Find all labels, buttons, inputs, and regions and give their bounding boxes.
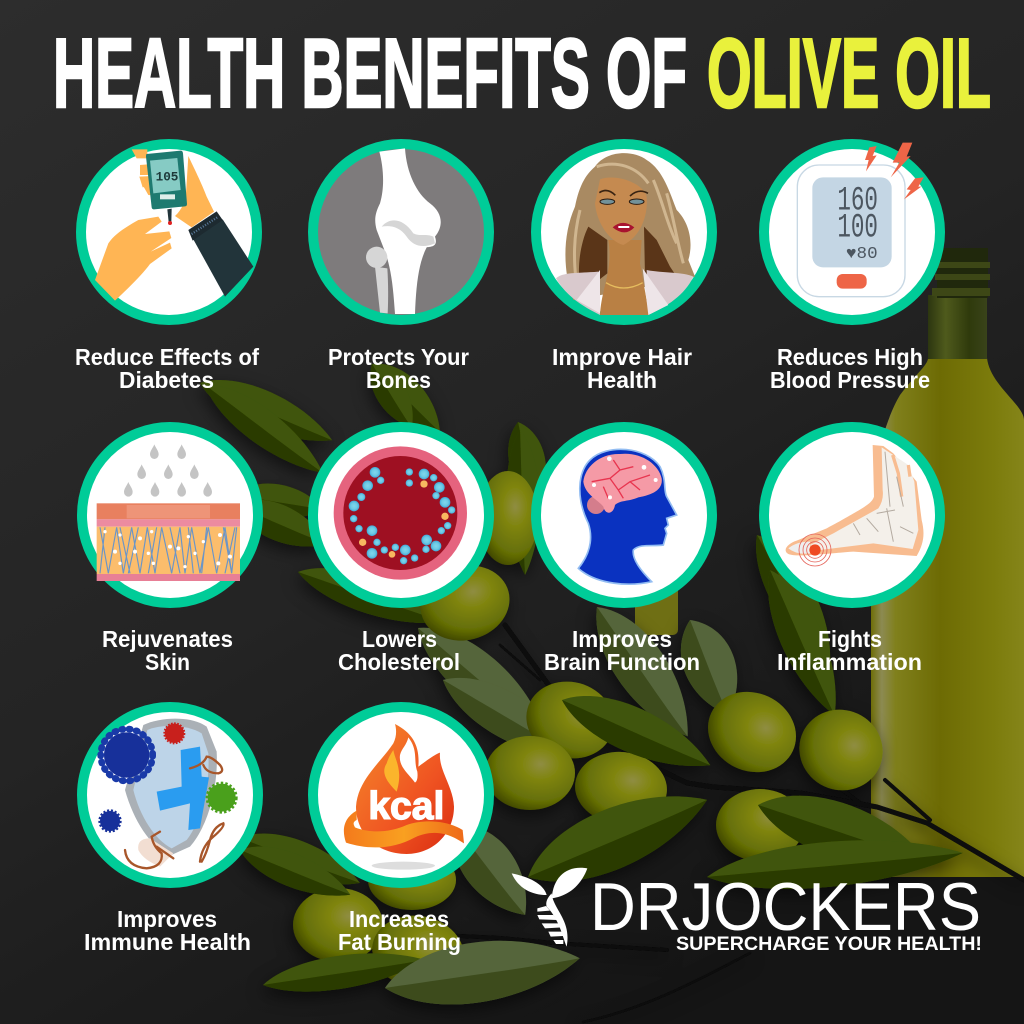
label: Protects Your [328,344,469,370]
label: Fights [818,626,882,652]
label: Inflammation [777,649,922,675]
label: Immune Health [84,929,251,955]
olives [293,471,896,995]
icon: glucose meter and hands: 105 [156,169,178,184]
panel: reduce effects of diabetes [75,144,259,393]
icon: knee joint x-ray [366,148,441,314]
logo: DrJockers: SUPERCHARGE YOUR HEALTH! [676,934,982,955]
icon: kcal flame with tape measure: kcal [368,784,444,828]
icon: blood pressure monitor: 100 [837,209,878,247]
icon: blood pressure monitor [797,143,924,297]
icon: glucose meter and hands [95,149,253,301]
icon: foot bones with pain point [786,445,923,566]
branch stems [440,625,1024,1022]
icon: skin layers with droplets [97,444,240,581]
icon: blood pressure monitor: ♥80 [846,245,878,264]
label: Blood Pressure [770,367,930,393]
icon: head silhouette with brain [578,449,677,584]
label: Cholesterol [338,649,460,675]
label: Increases [349,906,449,932]
label: Reduces High [777,344,923,370]
icon: shield with viruses [100,719,236,868]
panel: increases fat burning [313,707,489,955]
panel: rejuvenates skin [82,427,258,675]
panel: fights inflammation [764,427,940,675]
icon: kcal flame with tape measure [344,724,464,870]
olive oil bottle [635,248,1024,877]
panel: reduces high blood pressure [764,143,940,393]
panel: protects your bones [313,144,489,393]
label: Bones [366,367,431,393]
label: Reduce Effects of [75,344,259,370]
icon: DNA leaf mark [512,868,587,947]
label: Improves [117,906,217,932]
icon: woman with long hair [556,153,695,315]
icon: blood pressure monitor: 160 [837,183,878,221]
label: Skin [145,649,190,675]
label: Rejuvenates [102,626,233,652]
label: Health [587,367,657,393]
logo: DrJockers [512,868,982,955]
label: Improves [572,626,672,652]
panel: lowers cholesterol [313,427,489,675]
label: Lowers [362,626,437,652]
label: Brain Function [544,649,700,675]
logo: DrJockers: DRJOCKERS [590,869,981,945]
panel: improve hair health [536,144,712,393]
label: Diabetes [119,367,214,393]
label: Improve Hair [552,344,692,370]
olive branch with leaves and olives [193,351,1024,1022]
icon: artery with cholesterol [334,446,467,580]
panel: improves brain function [536,427,712,675]
panel: improves immune health [82,707,258,955]
label: Fat Burning [338,929,461,955]
